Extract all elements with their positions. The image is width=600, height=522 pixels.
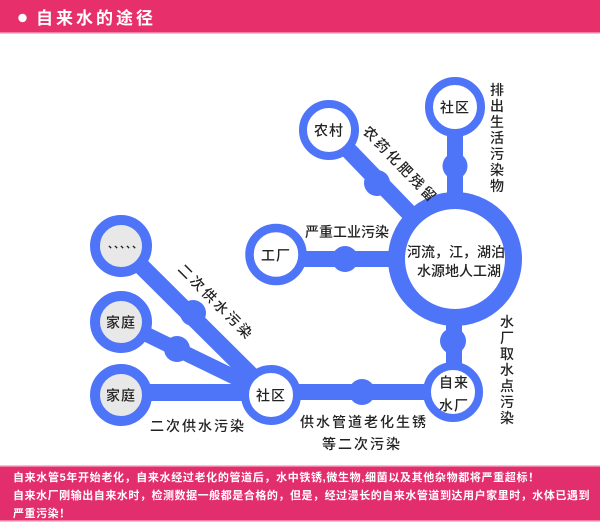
- label: domestic sewage: 排出生活污染物: [490, 82, 504, 194]
- footer line three: 严重污染！: [13, 506, 71, 520]
- node: factory: [250, 228, 302, 281]
- label: industrial pollution: 严重工业污染: [305, 224, 389, 240]
- node: community top: [429, 81, 481, 133]
- pipe: village to lake: [329, 130, 415, 219]
- node: unnamed home: 、、、、、: [108, 240, 142, 251]
- title: 自来水的途径: [36, 8, 156, 28]
- node: home bottom: 家庭: [106, 388, 136, 404]
- label: secondary pollution horizontal: 二次供水污染: [150, 418, 246, 434]
- pipe: lake to waterworks: [440, 310, 466, 380]
- node: waterworks: 自来: [439, 374, 469, 390]
- label: pipe aging: 供水管道老化生锈: [300, 414, 428, 430]
- diagram: upper network: [250, 81, 514, 380]
- node: home middle: [95, 296, 147, 348]
- node: lake source: [396, 200, 514, 318]
- node: waterworks: [427, 366, 479, 418]
- pipe: community to lake: [442, 107, 468, 207]
- footer line two: 自来水厂刚输出自来水时，检测数据一般都是合格的，但是，经过漫长的自来水管道到达用户家里时，水体已遇到: [13, 488, 590, 502]
- footer panel: [0, 466, 600, 522]
- node: community bottom: [245, 369, 297, 421]
- diagram: lower network: [95, 220, 479, 421]
- label: pipe aging second line: 等二次污染: [322, 436, 402, 452]
- pipe: home two to community: [121, 322, 265, 392]
- pipe: home three to community: [121, 384, 271, 401]
- header banner: [0, 0, 600, 34]
- footer line one: 自来水管5年开始老化，自来水经过老化的管道后，水中铁锈,微生物,细菌以及其他杂物都将严重超标！: [13, 470, 540, 484]
- header bullet: [18, 14, 27, 22]
- node: waterworks: 水厂: [439, 398, 469, 414]
- node: village: 农村: [314, 122, 344, 138]
- label: intake pollution: 水厂取水点污染: [500, 314, 514, 426]
- node: community bottom: 社区: [256, 388, 286, 404]
- node: factory: 工厂: [261, 248, 291, 264]
- pipe: factory to lake: [276, 246, 396, 272]
- pipe: home one to community: [121, 246, 271, 395]
- label: secondary pollution diagonal: 二次供水污染: [175, 261, 257, 343]
- node: community top: 社区: [440, 100, 470, 116]
- node: village: [303, 104, 355, 156]
- node: home bottom: [95, 369, 147, 421]
- node: home middle: 家庭: [106, 314, 136, 330]
- node: unnamed home: [95, 220, 147, 272]
- pipe: community to waterworks: [271, 379, 453, 405]
- label: pesticide residue: 农药化肥残留: [360, 123, 441, 206]
- node: lake source: 水源地人工湖: [417, 263, 501, 279]
- node: lake source: 河流，江，湖泊: [407, 244, 505, 260]
